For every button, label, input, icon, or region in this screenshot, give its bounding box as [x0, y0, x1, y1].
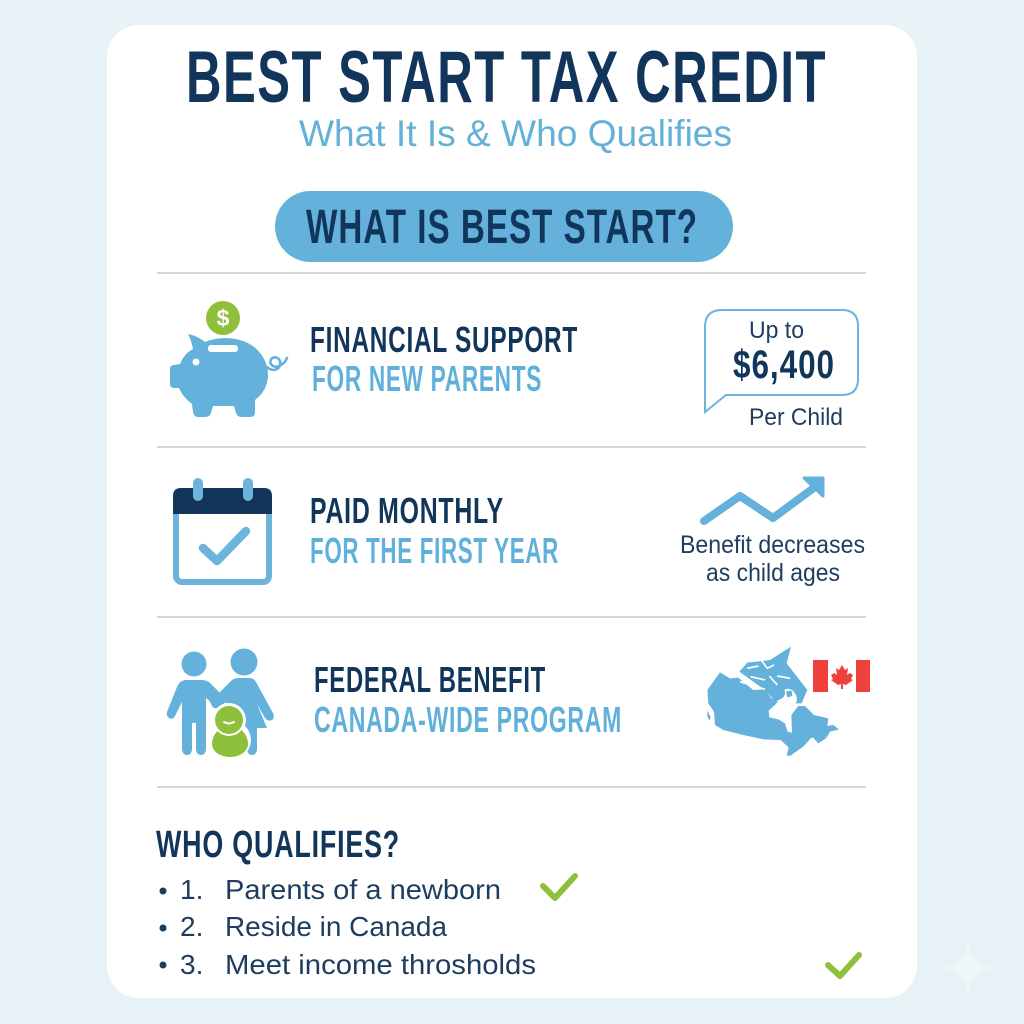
icon: piggy bank with coin: $: [217, 305, 230, 331]
note: benefit decreases: as child ages: [706, 559, 840, 587]
note: benefit decreases: [680, 531, 865, 587]
heading: who qualifies: WHO QUALIFIES?: [156, 824, 400, 866]
row 2 text: paid monthly: PAID MONTHLY: [310, 490, 504, 531]
row 1 text: financial support: FINANCIAL SUPPORT: [310, 319, 578, 360]
icon: calendar with check: [173, 478, 272, 582]
list: qualification criteria: 1.: [180, 874, 203, 905]
list: qualification criteria: [160, 874, 536, 980]
row 1 text: financial support: FOR NEW PARENTS: [312, 358, 542, 399]
list: qualification criteria: Parents of a newborn: [225, 874, 501, 905]
list: qualification criteria: 3.: [180, 949, 203, 980]
callout: up to $6,400 per child: Up to: [749, 317, 804, 344]
note: benefit decreases: Benefit decreases: [680, 531, 865, 559]
row 3 text: federal benefit: FEDERAL BENEFIT: [314, 659, 546, 700]
row 2 text: paid monthly: FOR THE FIRST YEAR: [310, 530, 559, 571]
list: qualification criteria: 2.: [180, 911, 203, 942]
icon: trend arrow: [704, 478, 823, 521]
list: qualification criteria: Meet income throsholds: [225, 949, 536, 980]
list: qualification criteria: Reside in Canada: [225, 911, 447, 942]
subtitle: What It Is & Who Qualifies: [299, 113, 732, 154]
callout: up to $6,400 per child: $6,400: [733, 343, 835, 387]
panel: main card: [107, 25, 917, 998]
icon: piggy bank with coin: [170, 301, 287, 417]
section banner: what is best start: [275, 191, 733, 262]
row 2 text: paid monthly: [310, 490, 559, 571]
icon: Canadian flag: [813, 660, 870, 692]
icon: map of Canada: [707, 647, 839, 756]
row 1 text: financial support: [310, 319, 578, 399]
row 3 text: federal benefit: [314, 659, 622, 740]
icon: family with baby: [167, 648, 274, 760]
icon: green check 2: [828, 955, 859, 976]
callout: up to $6,400 per child: Per Child: [749, 404, 843, 431]
icon: green check 1: [543, 876, 575, 898]
row 3 text: federal benefit: CANADA-WIDE PROGRAM: [314, 699, 622, 740]
section banner: what is best start: WHAT IS BEST START?: [306, 201, 698, 254]
callout: up to $6,400 per child: [705, 310, 858, 431]
